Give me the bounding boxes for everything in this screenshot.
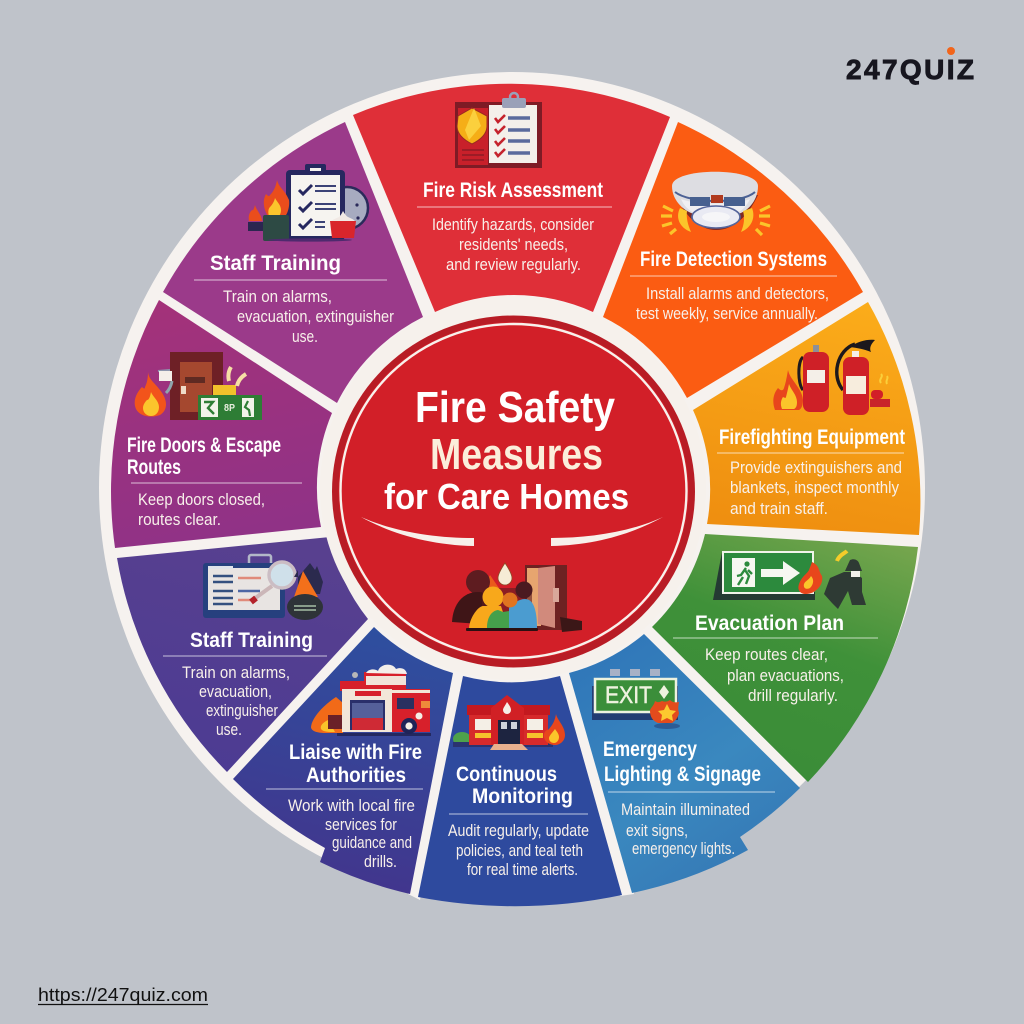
description: Train on alarms, <box>182 664 290 682</box>
panel: liaise with fire authorities <box>233 627 453 894</box>
heading <box>127 434 281 479</box>
heading: Fire Detection Systems <box>640 248 827 271</box>
description <box>636 285 829 323</box>
source link: https://247quiz.com <box>38 985 208 1005</box>
description: services for <box>325 816 397 834</box>
description: Keep routes clear, <box>705 646 828 664</box>
description: test weekly, service annually. <box>636 305 818 323</box>
description <box>730 459 902 518</box>
panel: firefighting equipment <box>693 302 920 535</box>
description: drill regularly. <box>748 687 838 705</box>
icon: exit sign with runner <box>713 551 866 609</box>
heading: Continuous <box>456 763 557 786</box>
icon: exit sign: EXIT <box>605 682 652 709</box>
hub white ring <box>320 296 706 680</box>
description: routes clear. <box>138 511 221 529</box>
description: and train staff. <box>730 500 828 518</box>
icon: care home building <box>453 695 565 750</box>
panel: staff training (lower) <box>117 537 368 772</box>
description: for real time alerts. <box>467 861 578 879</box>
icon: clipboard and shield <box>455 93 542 168</box>
sector: purple <box>163 122 423 403</box>
center hub <box>320 296 706 680</box>
description: policies, and teal teth <box>456 842 583 860</box>
panel: continuous monitoring <box>418 676 622 906</box>
panel: fire detection systems <box>603 122 863 398</box>
heading: Lighting & Signage <box>604 763 761 786</box>
panel: staff training (upper) <box>163 122 423 403</box>
sector: indigo <box>117 537 368 772</box>
description <box>223 288 394 346</box>
sector: magenta <box>111 300 332 548</box>
heading: Fire Risk Assessment <box>423 179 603 202</box>
description <box>138 491 265 529</box>
description: Maintain illuminated <box>621 801 750 819</box>
title: Measures <box>430 430 603 479</box>
title <box>384 383 629 517</box>
heading <box>456 763 573 808</box>
sector: royal blue <box>418 676 622 906</box>
description: guidance and <box>332 834 412 852</box>
description <box>432 216 594 274</box>
description: Install alarms and detectors, <box>646 285 829 303</box>
description: Audit regularly, update <box>448 822 589 840</box>
sector: amber <box>693 302 920 535</box>
icon: smoke detector <box>661 172 770 235</box>
description <box>621 801 750 858</box>
icon: fire engine <box>311 665 431 736</box>
description <box>448 822 589 879</box>
icon: checklist with flames <box>248 164 368 242</box>
description: extinguisher <box>206 702 278 720</box>
heading: Emergency <box>603 738 697 761</box>
swoosh divider <box>361 517 663 546</box>
panel: emergency lighting and signage <box>569 634 800 893</box>
wheel white backing <box>99 72 925 904</box>
description: plan evacuations, <box>727 667 844 685</box>
sector: blue <box>569 634 800 893</box>
heading: Liaise with Fire <box>289 741 422 764</box>
description: residents' needs, <box>459 236 568 254</box>
icon: door, flame and exit sign <box>135 352 262 420</box>
heading: Authorities <box>306 764 406 787</box>
title: Fire Safety <box>415 383 615 432</box>
panel: fire risk assessment <box>353 84 670 312</box>
heading: Firefighting Equipment <box>719 426 905 449</box>
description: evacuation, extinguisher <box>237 308 394 326</box>
icon: document with magnifier <box>203 555 323 620</box>
description <box>182 664 290 739</box>
icon: exit sign <box>592 669 680 729</box>
icon: door, flame and exit sign: 8P <box>224 403 235 414</box>
heading <box>289 741 422 787</box>
description: Keep doors closed, <box>138 491 265 509</box>
icon: residents and exit door <box>452 563 582 632</box>
sector: blue violet <box>233 627 453 894</box>
heading: Routes <box>127 456 181 479</box>
icon: extinguishers and flame <box>773 340 890 415</box>
sector: orange <box>603 122 863 398</box>
heading: Evacuation Plan <box>695 612 844 635</box>
description: drills. <box>364 853 397 871</box>
description <box>288 797 415 871</box>
panel: evacuation plan <box>652 534 918 782</box>
description: evacuation, <box>199 683 272 701</box>
description: Work with local fire <box>288 797 415 815</box>
description: Train on alarms, <box>223 288 332 306</box>
sector: red <box>353 84 670 312</box>
hub red disc <box>332 316 695 668</box>
title: for Care Homes <box>384 476 629 517</box>
description <box>705 646 844 705</box>
heading <box>603 738 761 786</box>
heading: Staff Training <box>190 629 313 652</box>
description: and review regularly. <box>446 256 581 274</box>
description: exit signs, <box>626 822 688 840</box>
description: blankets, inspect monthly <box>730 479 900 497</box>
panel: fire doors and escape routes <box>111 300 332 548</box>
description: emergency lights. <box>632 840 735 858</box>
sector: green <box>652 534 918 782</box>
description: use. <box>216 721 242 739</box>
heading: Monitoring <box>472 785 573 808</box>
logo: 247QUIZ: 247QUIZ <box>846 54 974 85</box>
description: Provide extinguishers and <box>730 459 902 477</box>
description: use. <box>292 328 318 346</box>
heading: Fire Doors & Escape <box>127 434 281 457</box>
heading: Staff Training <box>210 252 341 275</box>
description: Identify hazards, consider <box>432 216 594 234</box>
